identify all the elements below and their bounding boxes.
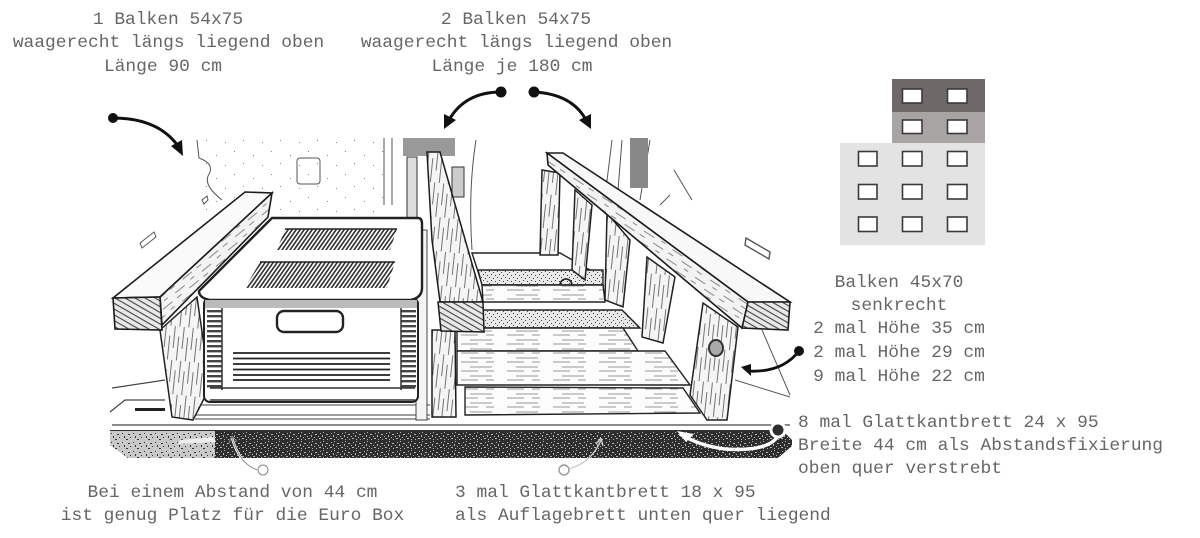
speckled wall noise: [200, 140, 385, 225]
heading: left beam label: waagerecht längs liegend oben: [13, 33, 324, 53]
lid slats: [277, 229, 397, 250]
text: upright beams: 2 mal Höhe 35 cm: [813, 319, 985, 339]
text: support boards: als Auflagebrett unten quer liegend: [455, 506, 831, 526]
back window panel: [403, 138, 455, 156]
arrow: white to strut: [677, 423, 785, 449]
diagram: beam cross-section layout: [840, 79, 985, 245]
text: spacer boards: Breite 44 cm als Abstandsfixierung: [798, 436, 1163, 456]
left post: [160, 297, 210, 420]
illustration: van interior with wooden frame and Euro box: [110, 138, 792, 458]
arrow: to right beam: [528, 86, 591, 129]
text: upright beams: 9 mal Höhe 22 cm: [813, 367, 985, 387]
text: spacer boards: 8 mal Glattkantbrett 24 x 95: [798, 413, 1099, 433]
text: upright beams: senkrecht: [851, 296, 947, 316]
heading: centre beams label: waagerecht längs liegend oben: [361, 33, 672, 53]
heading: left beam label: 1 Balken 54x75: [93, 10, 243, 30]
left beam: [113, 192, 272, 330]
text: Euro box spacing: ist genug Platz für die Euro Box: [61, 506, 404, 526]
text: upright beams: Balken 45x70: [835, 273, 963, 293]
right beam: [547, 153, 790, 330]
text: Euro box spacing: [61, 483, 404, 526]
text: support boards: [455, 483, 831, 526]
arrow: to centre beam: [444, 86, 506, 129]
text: upright beams: [813, 273, 985, 387]
text: upright beams: 2 mal Höhe 29 cm: [813, 343, 985, 363]
text: spacer boards: oben quer verstrebt: [798, 459, 1002, 479]
back floor boards and speckled mats: [457, 253, 700, 415]
box lid: [199, 218, 422, 300]
box stripes: [233, 353, 390, 380]
heading: centre beams label: [361, 10, 672, 77]
beam cells: [858, 89, 967, 232]
base block: [840, 143, 985, 245]
top row: [892, 79, 985, 112]
Euro box: [199, 218, 422, 402]
box body: [204, 298, 418, 402]
arrow: to left beam: [108, 113, 183, 156]
heading: centre beams label: 2 Balken 54x75: [441, 10, 591, 30]
second row: [892, 112, 985, 143]
heading: centre beams label: Länge je 180 cm: [431, 57, 593, 77]
arrow: to upright post: [741, 346, 804, 376]
corner ribs: [207, 308, 222, 390]
text: Euro box spacing: Bei einem Abstand von 44 cm: [88, 483, 377, 503]
text: spacer boards: [798, 413, 1163, 479]
heading: left beam label: [13, 10, 324, 77]
floor panel: [112, 400, 790, 432]
handle: [277, 311, 343, 332]
ground strip with speckle: [110, 429, 792, 458]
arrow: thin to floor right: [559, 438, 603, 475]
centre post and beam: [427, 152, 484, 417]
heading: left beam label: Länge 90 cm: [104, 57, 222, 77]
text: support boards: 3 mal Glattkantbrett 18 x 95: [455, 483, 756, 503]
right side uprights: [540, 170, 738, 420]
van wall details: [140, 138, 790, 397]
arrow: thin to floor left: [229, 436, 268, 475]
